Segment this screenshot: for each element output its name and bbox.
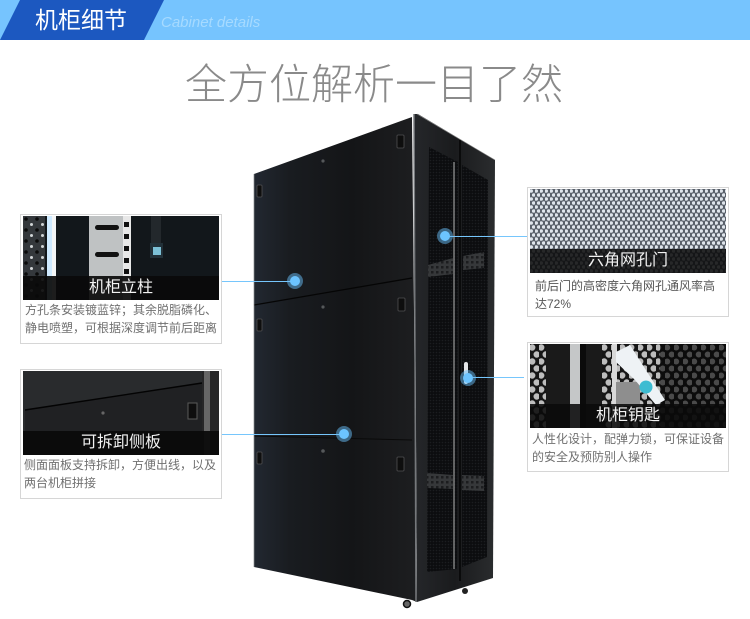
- mesh description: [535, 279, 715, 310]
- door handle: [464, 362, 468, 384]
- door mesh: [427, 147, 458, 572]
- cabinet wheels: [404, 588, 468, 608]
- main title: 全方位解析一目了然: [185, 61, 563, 108]
- pillar caption: 机柜立柱: [89, 279, 153, 296]
- cabinet side panel: [254, 117, 417, 602]
- mesh description: 达72%: [535, 296, 571, 310]
- pillar photo: [23, 216, 219, 300]
- panel: hexagonal mesh door: [527, 187, 729, 317]
- hotspot: pillar: [287, 273, 303, 289]
- hotspot: mesh door: [437, 228, 453, 244]
- panel: cabinet key: [527, 342, 729, 472]
- header title: 机柜细节: [35, 7, 127, 33]
- header blue tab: [0, 0, 164, 40]
- mesh caption: 六角网孔门: [588, 252, 668, 269]
- header subtitle: Cabinet details: [161, 14, 260, 31]
- key caption: 机柜钥匙: [596, 407, 660, 424]
- side panel description: [24, 458, 216, 490]
- header banner: [0, 0, 750, 40]
- key description: 的安全及预防别人操作: [532, 450, 652, 464]
- hotspot: side panel: [336, 426, 352, 442]
- connector lines: [222, 236, 528, 434]
- side panel caption: 可拆卸侧板: [81, 434, 161, 451]
- panel: cabinet pillar: [20, 214, 222, 344]
- key description: 人性化设计，配弹力锁，可保证设备: [532, 432, 724, 446]
- mesh description: 前后门的高密度六角网孔通风率高: [535, 279, 715, 293]
- side panel description: 侧面面板支持拆卸，方便出线，以及: [24, 458, 216, 472]
- mesh photo: [530, 189, 726, 273]
- pillar description: [25, 303, 217, 334]
- pillar description: 方孔条安装镀蓝锌；其余脱脂磷化、: [25, 303, 217, 317]
- side panel description: 两台机柜拼接: [24, 476, 96, 490]
- side panel photo: [23, 371, 219, 455]
- panel: removable side panel: [20, 369, 222, 499]
- key photo: [530, 344, 726, 428]
- door vents: [428, 258, 453, 277]
- key description: [532, 432, 724, 464]
- hotspot: key: [460, 370, 476, 386]
- pillar description: 静电喷塑，可根据深度调节前后距离: [25, 320, 217, 334]
- cabinet front doors: [414, 114, 495, 602]
